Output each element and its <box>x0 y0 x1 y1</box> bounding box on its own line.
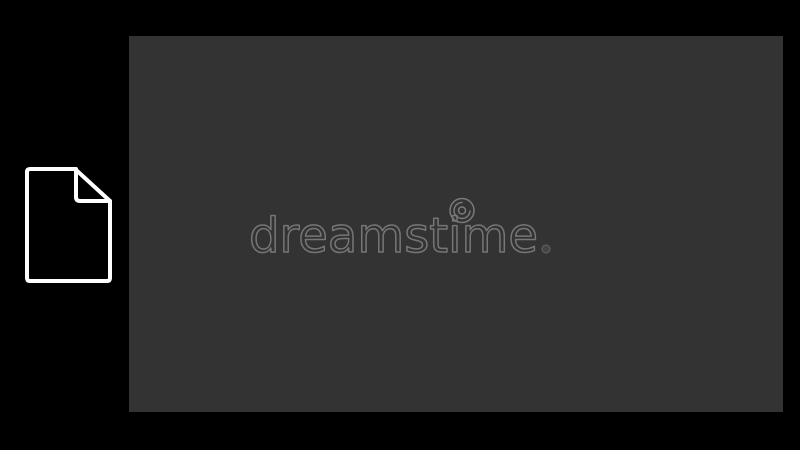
icon: watermark spiral <box>450 198 474 222</box>
panel: image placeholder <box>129 36 783 412</box>
watermark text: dreamstime <box>249 208 538 264</box>
icon: document with folded corner <box>27 169 110 281</box>
registered mark <box>542 245 550 253</box>
watermark wordmark <box>249 198 550 264</box>
